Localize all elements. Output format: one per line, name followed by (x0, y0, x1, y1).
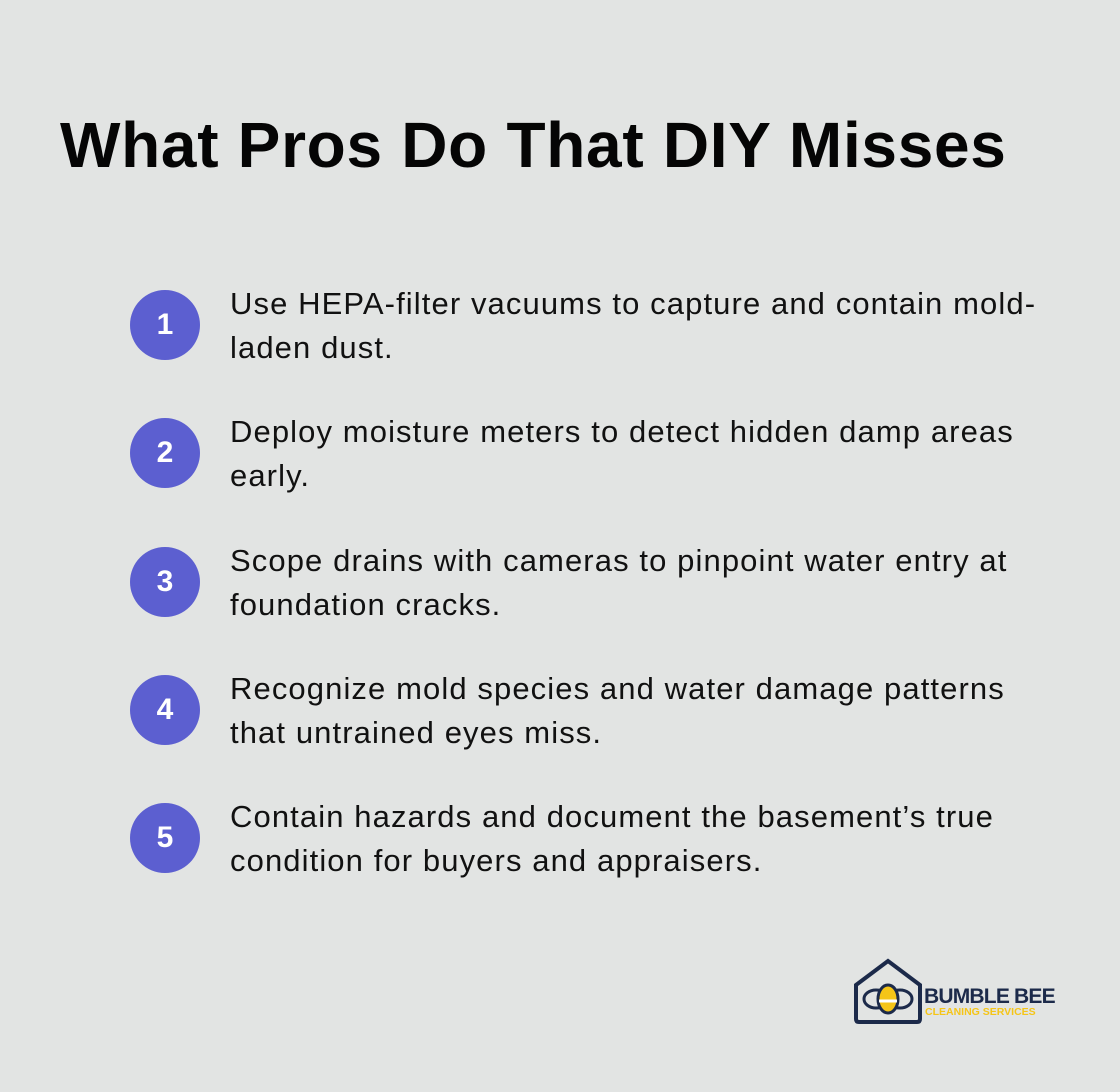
item 2 (130, 414, 1014, 493)
item 1: laden dust. (230, 330, 394, 365)
item 3: 3 (157, 565, 173, 598)
item 3: foundation cracks. (230, 587, 501, 622)
item 2: early. (230, 458, 310, 493)
item 1 (130, 286, 1036, 365)
item 5 (130, 799, 994, 878)
logo (854, 958, 1055, 1024)
logo: CLEANING SERVICES (925, 1006, 1036, 1018)
item 5: Contain hazards and document the basement’s true (230, 799, 994, 834)
item 4: 4 (157, 693, 173, 726)
logo: BUMBLE BEE (924, 985, 1055, 1008)
item 3: Scope drains with cameras to pinpoint water entry at (230, 543, 1007, 578)
item 5: 5 (157, 821, 173, 854)
item 3 (130, 543, 1007, 622)
item 4 (130, 671, 1005, 750)
item 4: that untrained eyes miss. (230, 715, 602, 750)
item 5: condition for buyers and appraisers. (230, 843, 762, 878)
item 1: 1 (157, 308, 173, 341)
title: What Pros Do That DIY Misses (60, 109, 1007, 181)
item 4: Recognize mold species and water damage patterns (230, 671, 1005, 706)
item 2: Deploy moisture meters to detect hidden damp areas (230, 414, 1014, 449)
item 1: Use HEPA-filter vacuums to capture and contain mold- (230, 286, 1036, 321)
item 2: 2 (157, 436, 173, 469)
